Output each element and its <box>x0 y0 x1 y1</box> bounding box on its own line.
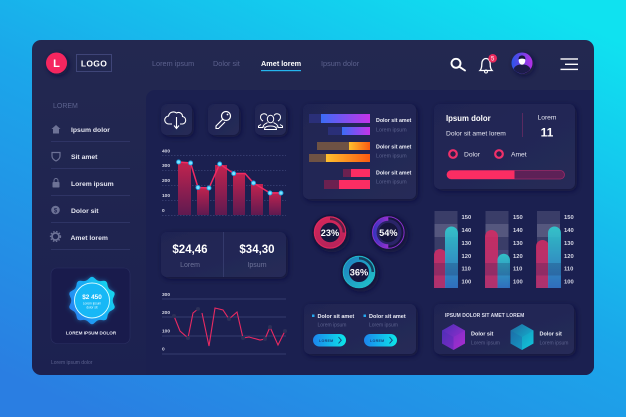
cubes card title: IPSUM DOLOR SIT AMET LOREM <box>445 313 524 319</box>
y-axis labels: 200 <box>162 310 170 316</box>
data points <box>177 160 283 195</box>
menu item: Dolor sit: $ <box>54 208 58 214</box>
menu item: Amet lorem <box>50 232 108 242</box>
column group 3 <box>536 211 561 288</box>
counter: Lorem <box>538 114 557 122</box>
column axis labels: 130 <box>513 241 523 247</box>
icon: notification bell: 5 <box>491 56 495 62</box>
action column 1: Dolor sit amet <box>318 314 354 320</box>
y-axis labels <box>162 148 170 214</box>
y-axis labels: 100 <box>162 193 170 199</box>
donut: 36%: 36% <box>350 267 368 277</box>
bar labels: Dolor sit amet <box>376 144 412 150</box>
column axis labels: 110 <box>513 266 522 272</box>
action column 1: LOREM <box>319 339 333 343</box>
counter <box>538 114 557 140</box>
navigation menu: Ipsum dolor <box>321 59 360 68</box>
logo box <box>76 54 112 72</box>
column axis labels: 120 <box>513 254 523 260</box>
y-axis labels: 200 <box>162 178 170 184</box>
menu item: Ipsum dolor <box>52 125 110 134</box>
stat card <box>161 232 286 277</box>
line series <box>174 309 198 338</box>
legend: Amet: Amet <box>511 152 527 158</box>
navigation menu: Amet lorem <box>261 59 302 68</box>
column axis labels: 120 <box>462 254 471 260</box>
column axis labels <box>462 215 574 286</box>
column axis labels: 110 <box>462 266 471 272</box>
action column 2 <box>364 314 406 346</box>
cube label 2 <box>540 332 568 346</box>
stat: $24,46: $24,46 <box>172 244 208 256</box>
column axis labels: 130 <box>462 241 471 247</box>
bars <box>178 162 281 215</box>
donut: 54%: 54% <box>379 228 397 238</box>
icon: hamburger menu <box>560 58 578 70</box>
action column 2: Dolor sit amet <box>369 314 406 320</box>
promo card <box>51 268 130 344</box>
y-axis labels: 400 <box>162 148 170 154</box>
action card <box>304 304 416 354</box>
counter: 11 <box>541 126 554 140</box>
horizontal bars card <box>303 104 416 199</box>
promo caption: LOREM IPSUM DOLOR <box>66 330 117 336</box>
badge: $2 450 <box>82 294 102 301</box>
donut charts <box>312 214 406 290</box>
icon tiles <box>161 104 286 135</box>
column axis labels: 100 <box>564 280 574 286</box>
bar labels: Lorem ipsum <box>376 180 407 186</box>
column charts <box>434 211 574 288</box>
column axis labels: 100 <box>462 280 471 286</box>
legend: Dolor <box>449 150 481 158</box>
icon: users <box>255 104 286 135</box>
bar labels: Dolor sit amet <box>376 170 412 176</box>
cube label 1: Dolor sit <box>471 332 493 338</box>
stat: $24,46 <box>172 244 208 269</box>
stat: $34,30 <box>239 244 275 269</box>
progress bar <box>447 170 564 179</box>
stat: $34,30: $34,30 <box>239 244 275 256</box>
column axis labels: 140 <box>462 228 471 234</box>
navigation menu: Dolor sit <box>213 59 240 68</box>
badge: Lorem ipsum <box>83 302 102 306</box>
header bar <box>46 52 578 74</box>
column group 2 <box>485 211 510 288</box>
navigation menu: Lorem ipsum <box>152 59 194 68</box>
icon: search <box>452 59 465 70</box>
menu item: Lorem ipsum: Lorem ipsum <box>71 181 114 188</box>
cube label 2: Lorem ipsum <box>540 340 568 346</box>
bar labels: Dolor sit amet <box>376 118 412 124</box>
icon: user avatar <box>512 52 532 74</box>
pink bars <box>324 169 370 189</box>
action column 1: Lorem ipsum <box>318 322 346 328</box>
line series <box>179 162 281 193</box>
menu item: Sit amet: Sit amet <box>71 154 98 161</box>
card subheading: Dolor sit amet lorem <box>446 130 506 138</box>
menu item: Dolor sit: Dolor sit <box>71 208 99 215</box>
line chart <box>162 292 287 354</box>
icon: cloud download <box>161 104 192 135</box>
cube label 2: Dolor sit <box>540 332 562 338</box>
card heading: Ipsum dolor <box>446 114 491 123</box>
legend: Dolor: Dolor <box>464 152 481 158</box>
column axis labels: 140 <box>564 228 574 234</box>
column axis labels: 140 <box>513 228 523 234</box>
action column 2: LOREM <box>370 339 384 343</box>
badge <box>69 277 115 324</box>
column axis labels: 110 <box>564 266 573 272</box>
data points <box>172 307 287 341</box>
logo circle: L <box>53 58 60 70</box>
column axis labels: 120 <box>564 254 574 260</box>
main dashboard panel <box>32 40 594 375</box>
column axis labels: 130 <box>564 241 574 247</box>
bar labels: Lorem ipsum <box>376 128 407 134</box>
sidebar heading: LOREM <box>53 103 78 110</box>
orange bars <box>309 142 370 162</box>
stat: $24,46: Lorem <box>180 262 200 269</box>
logo box: LOGO <box>81 58 107 68</box>
y-axis labels: 300 <box>162 292 170 298</box>
icon: purple hexagon cube <box>442 324 465 350</box>
y-axis labels: 300 <box>162 163 170 169</box>
action column 2: Lorem ipsum <box>369 322 398 328</box>
sidebar footer: Lorem ipsum dolor <box>51 360 93 366</box>
icon: teal hexagon cube <box>510 324 534 350</box>
y-axis labels: 0 <box>162 208 165 214</box>
logo circle <box>46 52 67 74</box>
purple bars <box>309 114 370 135</box>
y-axis labels: 0 <box>162 346 165 352</box>
donut: 23%: 23% <box>321 228 339 238</box>
legend: Amet <box>495 150 527 158</box>
y-axis labels: 100 <box>162 328 170 334</box>
icon: notification bell <box>480 54 497 73</box>
menu item: Sit amet <box>52 152 98 161</box>
action column 1 <box>312 314 354 346</box>
menu item: Amet lorem: Amet lorem <box>70 235 108 242</box>
stat: $34,30: Ipsum <box>247 262 267 269</box>
column axis labels: 150 <box>513 215 523 221</box>
menu item: Ipsum dolor: Ipsum dolor <box>71 127 110 134</box>
column group 1 <box>434 211 458 288</box>
column axis labels: 150 <box>564 215 574 221</box>
info card <box>434 104 575 189</box>
y-axis labels <box>162 292 170 352</box>
badge: dolor sit <box>86 306 98 310</box>
navigation menu <box>152 59 360 71</box>
cube label 1: Lorem ipsum <box>471 340 500 346</box>
bar labels <box>376 118 412 186</box>
cubes card <box>434 304 574 354</box>
bar and line chart <box>162 148 286 216</box>
column axis labels: 100 <box>513 280 523 286</box>
cube label 1 <box>471 332 500 346</box>
menu item: Lorem ipsum <box>52 178 114 188</box>
bar labels: Lorem ipsum <box>376 154 407 160</box>
icon: key <box>208 104 239 135</box>
column axis labels: 150 <box>462 215 471 221</box>
sidebar <box>50 103 130 366</box>
menu item: Dolor sit <box>51 206 99 215</box>
